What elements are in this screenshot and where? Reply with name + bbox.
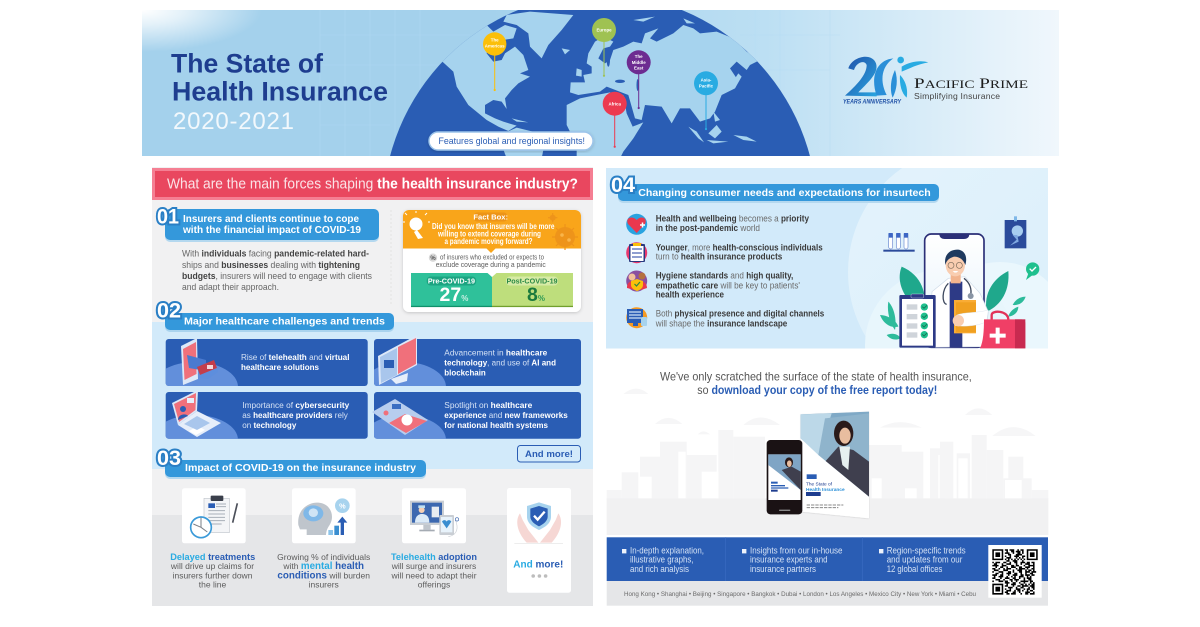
card: telehealth adoption: will need to adapt their <box>390 570 477 580</box>
world globe map <box>390 10 810 156</box>
fact box description: exclude coverage during a pandemic <box>436 260 546 269</box>
card: telehealth: healthcare solutions <box>241 362 319 372</box>
pre-COVID stat <box>411 273 492 307</box>
card: cybersecurity: on technology <box>242 420 296 430</box>
heading: main forces <box>152 168 593 200</box>
card: and more: And more! <box>513 559 563 570</box>
card: technology: blockchain <box>444 367 486 377</box>
report book: Health Insurance <box>806 487 845 493</box>
pre-COVID stat: Pre-COVID-19 <box>428 276 475 285</box>
office locations bar: Hong Kong • Shanghai • Beijing • Singapore • Bangkok • Dubai • London • Los Angeles • Mexico City • New York • Miami • Cebu <box>624 591 976 598</box>
fact box <box>402 210 581 312</box>
card: delayed treatments: insurers further down <box>173 570 253 580</box>
section 02 ribbon: Major healthcare challenges and trends <box>184 316 385 327</box>
item: hygiene standards: health experience <box>656 290 724 300</box>
item: health and wellbeing: Health and wellbeing becomes a priority <box>656 214 809 224</box>
icon: checklist <box>626 242 647 263</box>
pin: The Middle East <box>627 50 651 109</box>
pin: The Middle East: Middle <box>632 60 646 65</box>
card: telehealth adoption: will surge and insurers <box>391 561 476 571</box>
x-ray <box>1005 216 1026 248</box>
card: telehealth <box>166 338 368 386</box>
card: technology <box>374 336 581 386</box>
illustration: doctor in phone <box>880 216 1039 348</box>
card: experience <box>372 392 581 439</box>
item: physical and digital <box>655 309 824 328</box>
icon: digital channels <box>626 307 647 328</box>
fact box description: % <box>430 256 436 262</box>
card: experience: Spotlight on healthcare <box>444 400 532 410</box>
download call to action: We've only scratched the surface of the state of health insurance, <box>660 369 972 383</box>
post-COVID stat: Post-COVID-19 <box>506 276 558 285</box>
benefit: insights <box>742 545 843 574</box>
benefit: in-depth: and rich analysis <box>630 564 690 574</box>
icon: monitor with doctor <box>410 501 459 537</box>
pin: Asia-Pacific: Pacific <box>699 84 714 88</box>
test tubes <box>883 233 915 252</box>
benefit: region-specific: 12 global offices <box>887 564 943 574</box>
logo: Pacific Prime 20 years <box>843 57 1028 106</box>
item: health and wellbeing <box>656 214 809 233</box>
pin: Asia-Pacific: Asia- <box>701 78 712 82</box>
benefit: region-specific: and updates from our <box>887 555 962 565</box>
item: younger individuals: turn to health insurance products <box>656 252 782 262</box>
pill: global insights: Features global and regional insights! <box>438 136 585 147</box>
leaves <box>880 267 1026 340</box>
download call to action <box>660 369 972 397</box>
card: technology: Advancement in healthcare <box>444 348 547 358</box>
panel: section 04 consumer needs <box>606 168 1048 348</box>
title: 2020-2021 <box>173 108 294 135</box>
section 01 ribbon: 01 <box>157 206 179 228</box>
medical kit <box>980 312 1025 348</box>
fact box question: Did you know that insurers will be more <box>432 222 555 231</box>
card: experience: experience and new frameworks <box>444 410 568 420</box>
logo: Pacific Prime 20 years: PACIFIC P RIME <box>914 76 1028 92</box>
QR code <box>988 545 1042 598</box>
card: mental health: with mental health <box>282 561 364 572</box>
section 04 ribbon <box>611 174 939 203</box>
section 03 ribbon: Impact of COVID-19 on the insurance industry <box>185 463 416 474</box>
pin: Africa: Africa <box>608 101 621 106</box>
item: hygiene standards: Hygiene standards and high quality, <box>656 271 793 281</box>
icon: virus <box>548 213 578 250</box>
section 03 ribbon: 03 <box>157 447 181 470</box>
section 03 ribbon <box>157 447 426 479</box>
post-COVID stat: 8% <box>527 284 545 306</box>
section 02 panel <box>152 300 593 469</box>
button: and more: And more! <box>525 449 573 460</box>
title: The State of <box>171 49 324 79</box>
card: mental health: Growing % of individuals <box>277 552 370 562</box>
benefit: in-depth <box>622 545 704 574</box>
card: delayed treatments: Delayed treatments <box>170 552 255 563</box>
card: technology: technology, and use of AI and <box>444 358 556 368</box>
panel: main forces (left column) <box>152 167 593 606</box>
fact box question: Fact Box: <box>473 213 508 222</box>
icon: people with shield <box>626 270 647 292</box>
pin: Africa <box>603 92 627 148</box>
pin: Asia-Pacific <box>694 71 718 130</box>
fact box question: willing to extend coverage during <box>437 230 541 239</box>
icon: heart <box>626 214 647 235</box>
pre-COVID stat: 27% <box>440 284 468 306</box>
benefit: region-specific <box>879 545 966 574</box>
card: mental health <box>277 488 370 590</box>
icon: laptop <box>172 390 221 437</box>
title: Health Insurance <box>172 77 388 107</box>
section 01 text: ships and businesses dealing with tightening <box>182 260 360 271</box>
item: younger individuals: Younger, more health-conscious individuals <box>656 242 823 252</box>
icon: lightbulb <box>402 211 430 239</box>
report mockup <box>767 412 869 518</box>
icon: shield and hands <box>514 502 563 544</box>
pin: The Americas: The <box>491 38 499 42</box>
fact box description: of insurers who excluded or expects to <box>440 253 544 262</box>
download call to action: so download your copy of the free report today! <box>697 383 937 397</box>
card: telehealth: Rise of telehealth and virtual <box>241 352 350 362</box>
item: physical and digital: will shape the insurance landscape <box>655 318 787 328</box>
section 01 ribbon: with the financial impact of COVID-19 <box>182 225 361 236</box>
card: delayed treatments: the line <box>199 580 226 590</box>
benefit: insights: Insights from our in-house <box>750 545 843 555</box>
card: mental health: conditions will burden <box>277 570 370 581</box>
item: physical and digital: Both physical presence and digital channels <box>656 309 824 319</box>
banner <box>142 10 1059 156</box>
section 01 ribbon: Insurers and clients continue to cope <box>183 214 359 225</box>
card: experience: for national health systems <box>444 420 548 430</box>
icon: head and chart: % <box>339 501 346 510</box>
benefit: insights: insurance experts and <box>750 555 828 565</box>
cityscape background <box>607 389 1048 535</box>
section 04 ribbon: Changing consumer needs and expectations for insurtech <box>638 188 931 199</box>
card: telehealth adoption: offerings <box>418 580 450 590</box>
pin: The Middle East: The <box>635 54 643 59</box>
title <box>171 53 388 129</box>
pin: Europe: Europe <box>596 28 612 32</box>
office locations bar <box>607 581 1048 606</box>
card: cybersecurity: Importance of cybersecurity <box>242 400 349 410</box>
section 02 ribbon <box>157 300 394 332</box>
icon: monitor <box>378 335 417 385</box>
item: hygiene standards <box>656 271 800 300</box>
card: telehealth adoption <box>390 488 477 590</box>
section 04 ribbon: 04 <box>611 174 635 197</box>
phone mockup <box>767 440 802 514</box>
item: health and wellbeing: in the post-pandemic world <box>656 223 760 233</box>
button: and more <box>518 446 580 462</box>
card: mental health: insurers <box>309 580 339 590</box>
benefit: in-depth: In-depth explanation, <box>630 545 704 555</box>
card: delayed treatments: will drive up claims for <box>170 561 254 571</box>
section 01 text <box>182 249 372 293</box>
fact box question: a pandemic moving forward? <box>444 237 533 246</box>
section 01 text: budgets, insurers will need to engage with clients <box>182 271 372 282</box>
pill: global insights <box>429 132 593 150</box>
benefit: in-depth: illustrative graphs, <box>630 555 694 565</box>
post-COVID stat <box>488 273 573 307</box>
report book <box>801 412 869 518</box>
report book: The State of <box>806 482 833 488</box>
pin: The Middle East: East <box>634 66 644 71</box>
icon: phone with hand <box>181 338 218 385</box>
heading: main forces: What are the main forces shaping the health insurance industry? <box>167 176 578 192</box>
doctor <box>929 250 988 347</box>
benefit: insights: insurance partners <box>750 564 817 574</box>
clipboard <box>899 294 936 348</box>
icon: clipboard and clock <box>191 496 237 538</box>
section 01 text: With individuals facing pandemic-related hard- <box>182 249 369 260</box>
section 03 panel <box>152 447 593 606</box>
section 01 ribbon <box>157 206 379 242</box>
section 02 ribbon: 02 <box>157 300 181 322</box>
benefit: region-specific: Region-specific trends <box>887 545 966 555</box>
fact box description <box>429 253 546 269</box>
card: telehealth adoption: Telehealth adoption <box>391 552 477 563</box>
card: and more <box>507 488 571 593</box>
logo: Pacific Prime 20 years: Simplifying Insurance <box>914 91 1000 101</box>
pin: Europe <box>592 18 616 77</box>
icon: tablet <box>372 399 428 435</box>
chat bubble <box>1026 262 1039 280</box>
fact box question <box>432 212 555 246</box>
card: cybersecurity <box>166 390 368 439</box>
pin: The Americas: Americas <box>485 44 505 48</box>
logo: Pacific Prime 20 years: YEARS ANNIVERSARY <box>843 99 902 106</box>
card: delayed treatments <box>170 488 255 590</box>
card: cybersecurity: as healthcare providers rely <box>242 410 348 420</box>
item: hygiene standards: empathetic care will be key to patients' <box>656 280 800 290</box>
section 01 text: and adapt their approach. <box>182 282 279 293</box>
item: younger individuals <box>656 242 823 262</box>
phone <box>925 234 984 347</box>
pin: The Americas <box>483 32 506 91</box>
benefits bar <box>607 537 1048 581</box>
